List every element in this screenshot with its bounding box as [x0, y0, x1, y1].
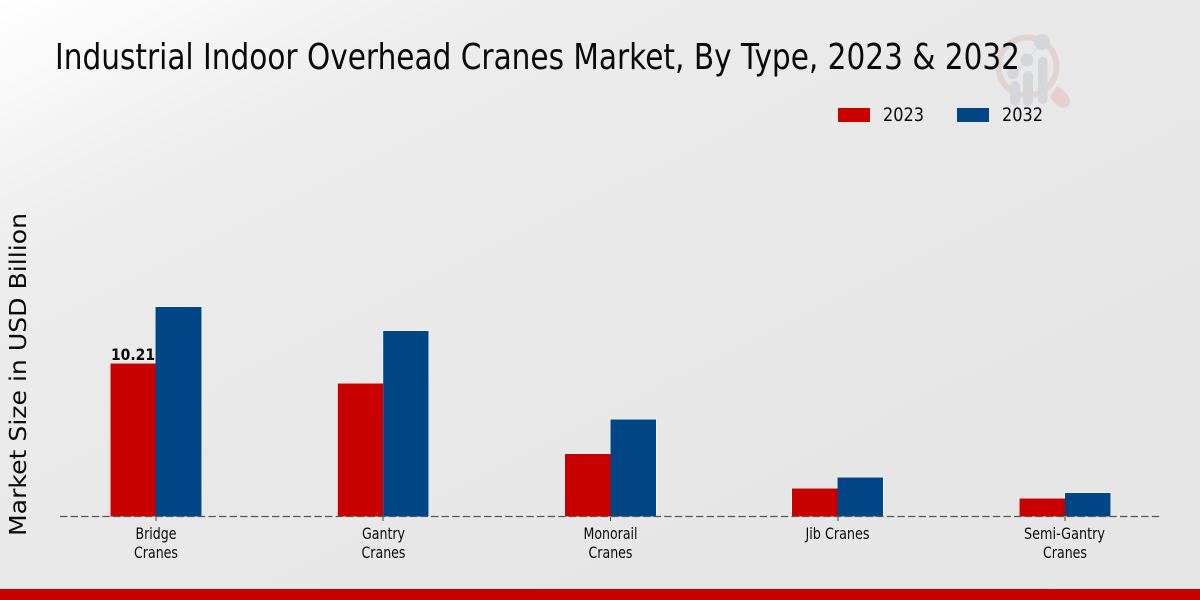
legend item: 2023 — [838, 104, 924, 126]
category label: Bridge Cranes: Cranes — [134, 543, 178, 562]
category label: Gantry Cranes: Cranes — [362, 543, 406, 562]
category label: Gantry Cranes: Gantry — [362, 524, 405, 543]
category label: Bridge Cranes: Bridge — [136, 524, 176, 543]
bars: Semi-Gantry Cranes — [1020, 493, 1110, 516]
category label: Monorail Cranes: Monorail — [584, 524, 638, 543]
y axis label: Market Size in USD Billion — [6, 213, 32, 536]
data label: 10.21 — [111, 345, 155, 364]
legend item: 2032 — [957, 104, 1043, 126]
category label: Semi-Gantry Cranes: Cranes — [1043, 543, 1087, 562]
title: Industrial Indoor Overhead Cranes Market, By Type, 2023 & 2032 — [55, 37, 1020, 78]
bars: Bridge Cranes — [110, 307, 202, 516]
legend — [838, 104, 1043, 126]
bars: Gantry Cranes — [338, 331, 428, 516]
legend item: 2023: 2023 — [883, 104, 924, 126]
legend item: 2032: 2032 — [1002, 104, 1043, 126]
footer bar — [0, 589, 1200, 600]
category label: Semi-Gantry Cranes: Semi-Gantry — [1024, 524, 1105, 543]
baseline axis — [60, 516, 1160, 518]
bars: Monorail Cranes — [565, 420, 656, 516]
bar chart — [60, 307, 1160, 562]
bars: Jib Cranes — [792, 478, 883, 516]
icon: watermark logo — [998, 34, 1070, 108]
category label: Jib Cranes: Jib Cranes — [805, 524, 870, 543]
category label: Monorail Cranes: Cranes — [588, 543, 632, 562]
